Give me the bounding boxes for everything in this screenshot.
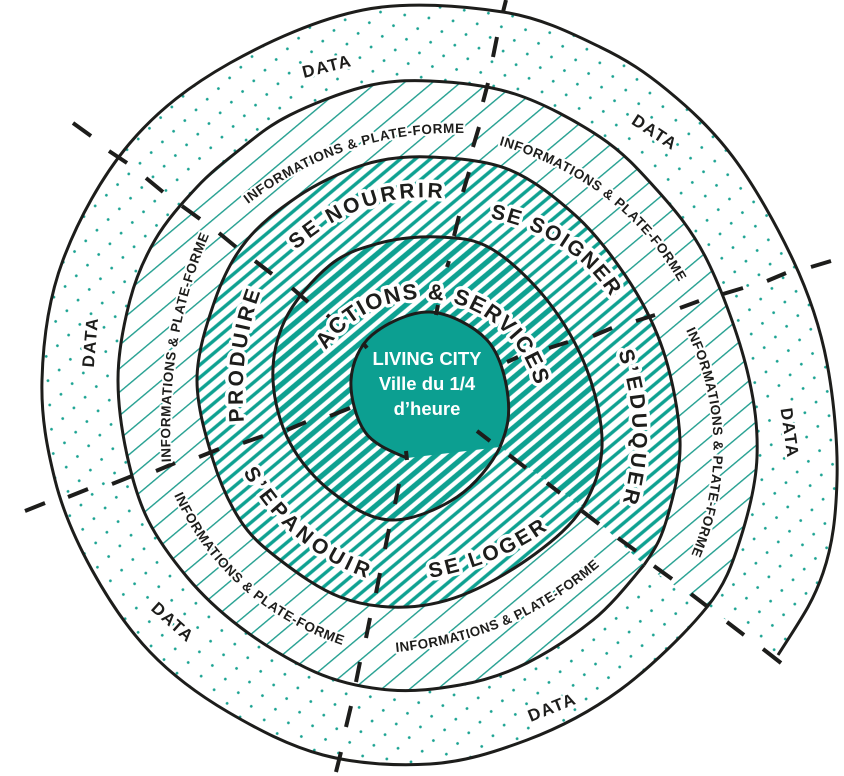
label: se soigner: SE SOIGNER — [488, 201, 624, 300]
label: data right: DATA — [777, 407, 802, 459]
label: data top right: DATA — [628, 111, 681, 154]
band: sectors (medium hatch) — [197, 157, 680, 607]
centre title: LIVING CITY — [373, 348, 482, 369]
divider: right — [507, 261, 831, 362]
label: informations left: INFORMATIONS & PLATE-FORME — [159, 230, 209, 464]
label: informations top left: INFORMATIONS & PLATE-FORME — [241, 122, 466, 204]
label: data left: DATA — [79, 316, 102, 368]
label: informations top right: INFORMATIONS & PLATE-FORME — [498, 136, 686, 282]
centre title — [373, 348, 482, 419]
label: data bottom left: DATA — [147, 598, 198, 646]
label: se loger: SE LOGER — [426, 516, 550, 580]
band: informations and platform (thin hatch) — [118, 81, 757, 691]
divider: upper left — [73, 123, 367, 348]
label: s'eduquer: S’EDUQUER — [616, 346, 651, 507]
divider: top — [436, 0, 506, 315]
divider: left — [25, 408, 350, 511]
label: informations bottom left: INFORMATIONS & PLATE-FORME — [174, 492, 344, 645]
label: data top: DATA — [300, 51, 354, 82]
divider: lower right — [477, 431, 781, 663]
label: informations bottom: INFORMATIONS & PLATE-FORME — [395, 557, 600, 654]
centre title: d’heure — [394, 398, 460, 419]
label: produire: PRODUIRE — [224, 285, 262, 425]
centre title: Ville du 1/4 — [379, 373, 476, 394]
label: informations right: INFORMATIONS & PLATE-FORME — [686, 326, 725, 558]
label: se nourrir: SE NOURRIR — [286, 179, 446, 250]
label: s'epanouir: S’EPANOUIR — [242, 464, 373, 581]
centre disc — [351, 312, 509, 458]
label: actions and services: ACTIONS & SERVICES — [314, 280, 552, 386]
band: actions and services (thick hatch) — [273, 237, 602, 520]
divider: bottom — [336, 451, 407, 772]
label: data bottom: DATA — [525, 689, 579, 726]
